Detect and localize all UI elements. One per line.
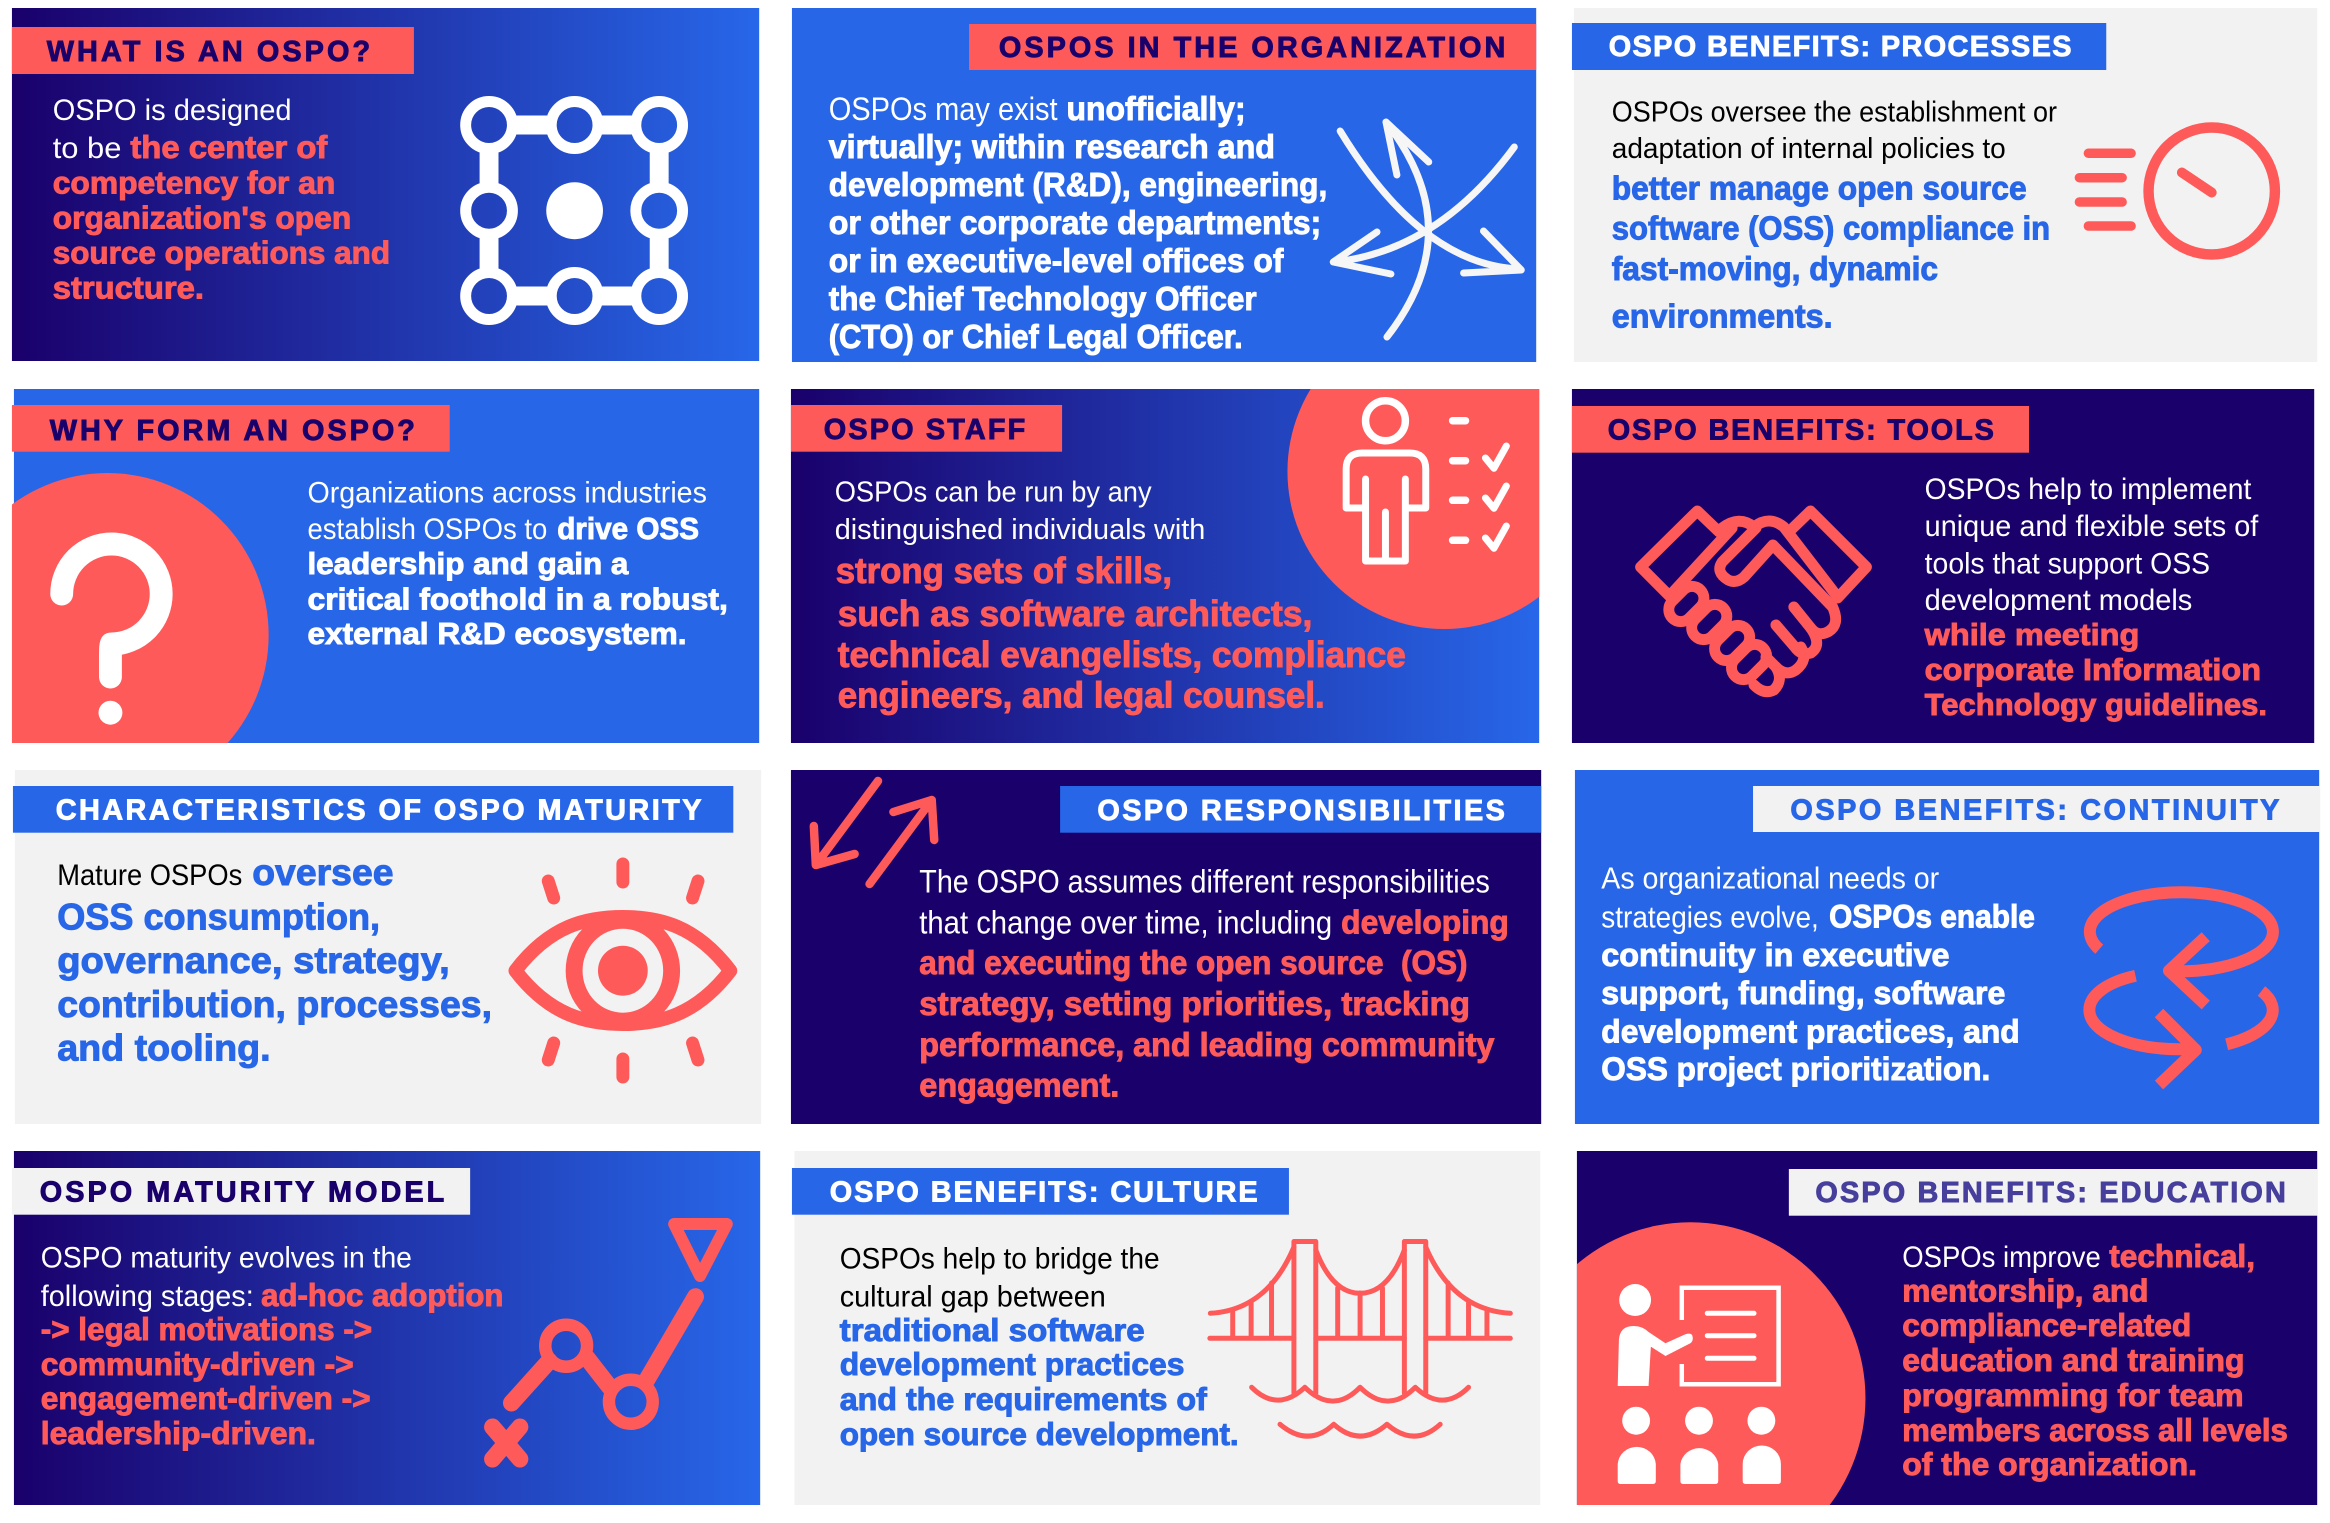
panel: OSPO benefits tools [1572, 389, 2314, 743]
text: what is an OSPO: source operations and [53, 235, 390, 271]
text: OSPOs in the organization: OSPOs may exist [829, 91, 1058, 127]
heading: OSPO benefits processes: OSPO BENEFITS: PROCESSES [1609, 31, 2071, 63]
text: OSPOs in the organization: unofficially; [1067, 91, 1246, 128]
text: OSPO benefits tools: unique and flexible sets of [1925, 510, 2259, 543]
panel: why form an OSPO [12, 389, 760, 743]
text: OSPO maturity model: ad-hoc adoption [261, 1278, 503, 1313]
heading: what is an OSPO [12, 27, 414, 74]
text: what is an OSPO: the center of [130, 130, 328, 165]
text: why form an OSPO: leadership and gain a [307, 547, 629, 581]
heading: OSPO staff [791, 405, 1062, 452]
text: OSPO maturity model [41, 1241, 503, 1451]
text: OSPO benefits education: of the organization. [1902, 1447, 2197, 1482]
text: what is an OSPO: organization's open [53, 200, 351, 236]
text: what is an OSPO: to be [53, 132, 121, 165]
text: OSPO benefits continuity: continuity in executive [1601, 937, 1950, 973]
text: OSPO benefits culture: development practices [840, 1347, 1184, 1382]
text: OSPO benefits continuity: OSS project prioritization. [1601, 1051, 1990, 1087]
panel: OSPO responsibilities [791, 770, 1541, 1124]
text: OSPO benefits continuity: support, funding, software [1601, 975, 2005, 1011]
text: why form an OSPO: critical foothold in a robust, [307, 582, 728, 617]
heading: OSPO benefits tools: OSPO BENEFITS: TOOLS [1608, 414, 1994, 446]
text: OSPO benefits tools: Technology guidelines. [1925, 688, 2267, 722]
text: why form an OSPO: external R&D ecosystem. [307, 617, 687, 651]
text: OSPO benefits continuity: As organizational needs or [1601, 860, 1939, 896]
text: OSPO benefits education: education and training [1902, 1343, 2245, 1378]
text: OSPO maturity model: following stages: [41, 1280, 254, 1313]
text: OSPO benefits education: programming for team [1902, 1378, 2244, 1413]
text: OSPO benefits continuity [1601, 860, 2035, 1087]
text: OSPO benefits tools: tools that support OSS [1925, 547, 2210, 581]
icon: two-way arrows [814, 781, 934, 884]
text: what is an OSPO: OSPO is designed [53, 94, 292, 127]
text: OSPO benefits culture: and the requirements of [840, 1382, 1208, 1417]
text: OSPO responsibilities: and executing the open source (OS) [919, 945, 1468, 982]
icon: node network [466, 102, 683, 320]
text: OSPOs in the organization [829, 91, 1327, 356]
heading: OSPO benefits tools [1572, 406, 2029, 453]
text: OSPO benefits processes: OSPOs oversee the establishment or [1612, 96, 2057, 129]
text: characteristics of OSPO maturity: and tooling. [57, 1027, 271, 1068]
text: OSPOs in the organization: development (R&D), engineering, [829, 167, 1327, 204]
heading: OSPO responsibilities [1060, 786, 1541, 833]
text: OSPO staff: technical evangelists, compliance [838, 635, 1406, 675]
text: OSPOs in the organization: the Chief Technology Officer [829, 281, 1257, 318]
text: OSPO benefits education: members across all levels [1902, 1413, 2288, 1448]
heading: OSPO benefits continuity: OSPO BENEFITS: CONTINUITY [1790, 794, 2279, 826]
text: characteristics of OSPO maturity: oversee [252, 852, 394, 893]
panel: OSPO staff [790, 389, 1540, 743]
heading: OSPO benefits continuity [1753, 786, 2320, 832]
panel: characteristics of OSPO maturity [13, 770, 761, 1124]
text: OSPO responsibilities: The OSPO assumes different responsibilities [919, 863, 1490, 900]
text: OSPO responsibilities: developing [1341, 904, 1509, 942]
text: OSPO benefits continuity: OSPOs enable [1829, 898, 2035, 935]
text: OSPO benefits education: mentorship, and [1902, 1273, 2149, 1309]
heading: characteristics of OSPO maturity: CHARACTERISTICS OF OSPO MATURITY [56, 794, 701, 826]
text: OSPO maturity model: leadership-driven. [41, 1416, 316, 1451]
text: OSPO benefits processes: fast-moving, dynamic [1612, 251, 1938, 288]
text: OSPO benefits processes: adaptation of internal policies to [1612, 133, 2006, 165]
text: OSPO benefits tools: development models [1925, 584, 2192, 617]
heading: OSPOs in the organization [969, 24, 1536, 70]
icon: cycle arrows [2089, 892, 2273, 1085]
text: characteristics of OSPO maturity: governance, strategy, [57, 940, 450, 981]
text: OSPO responsibilities [919, 863, 1509, 1105]
heading: OSPO benefits education: OSPO BENEFITS: EDUCATION [1815, 1177, 2286, 1209]
text: OSPO benefits culture: OSPOs help to bridge the [840, 1242, 1160, 1276]
text: OSPO benefits culture: cultural gap between [840, 1280, 1106, 1314]
text: OSPO benefits processes: software (OSS) compliance in [1612, 210, 2050, 248]
heading: OSPOs in the organization: OSPOS IN THE ORGANIZATION [999, 32, 1505, 64]
icon: question mark in circle [12, 473, 269, 743]
text: OSPO maturity model: community-driven -> [41, 1347, 354, 1382]
text: OSPO staff: engineers, and legal counsel. [838, 675, 1325, 716]
text: what is an OSPO: structure. [53, 270, 204, 306]
heading: OSPO benefits education [1789, 1169, 2318, 1216]
text: OSPO benefits education: compliance-related [1902, 1308, 2191, 1343]
text: OSPO benefits education: technical, [2109, 1239, 2255, 1274]
heading: OSPO maturity model [12, 1168, 470, 1215]
text: OSPO benefits culture [840, 1242, 1239, 1452]
text: OSPO benefits tools: corporate Information [1925, 653, 2261, 687]
heading: why form an OSPO: WHY FORM AN OSPO? [50, 415, 415, 447]
icon: handshake [1641, 511, 1866, 692]
text: OSPO staff: such as software architects, [838, 594, 1312, 634]
heading: OSPO responsibilities: OSPO RESPONSIBILITIES [1097, 795, 1505, 827]
icon: growth line with target [493, 1224, 727, 1459]
text: OSPO staff [835, 476, 1406, 716]
text: OSPOs in the organization: (CTO) or Chief Legal Officer. [829, 319, 1243, 356]
text: OSPO benefits culture: open source development. [840, 1417, 1239, 1452]
text: OSPOs in the organization: or in executive-level offices of [829, 243, 1284, 280]
text: OSPO benefits education [1902, 1239, 2288, 1482]
panel: OSPO benefits education [1576, 1151, 2318, 1505]
icon: person with checklist [1287, 389, 1540, 629]
text: OSPO maturity model: OSPO maturity evolves in the [41, 1241, 412, 1275]
icon: presenter with audience [1576, 1222, 1866, 1505]
heading: OSPO benefits processes [1572, 23, 2106, 70]
text: characteristics of OSPO maturity: Mature OSPOs [57, 859, 242, 892]
text: OSPOs in the organization: virtually; within research and [829, 129, 1275, 166]
heading: characteristics of OSPO maturity [13, 786, 733, 833]
text: OSPO maturity model: -> legal motivations -> [41, 1312, 372, 1347]
heading: OSPO maturity model: OSPO MATURITY MODEL [40, 1176, 444, 1208]
text: OSPOs in the organization: or other corporate departments; [829, 205, 1321, 242]
panel: OSPO benefits continuity [1575, 770, 2320, 1124]
text: OSPO benefits tools [1924, 473, 2267, 722]
text: OSPO benefits processes: environments. [1612, 298, 1833, 336]
text: OSPO benefits continuity: development practices, and [1601, 1013, 2020, 1050]
icon: stopwatch with speed lines [2079, 128, 2275, 254]
text: OSPO staff: distinguished individuals with [835, 514, 1205, 546]
text: OSPO maturity model: engagement-driven -> [41, 1381, 371, 1416]
heading: OSPO benefits culture: OSPO BENEFITS: CULTURE [830, 1176, 1258, 1208]
text: OSPO benefits continuity: strategies evolve, [1601, 899, 1819, 935]
heading: OSPO benefits culture [792, 1168, 1289, 1215]
panel: what is an OSPO [12, 8, 759, 361]
text: characteristics of OSPO maturity: OSS consumption, [57, 896, 380, 937]
text: characteristics of OSPO maturity: contribution, processes, [57, 984, 492, 1025]
heading: why form an OSPO [12, 405, 450, 452]
panel: OSPO benefits culture [792, 1151, 1540, 1505]
panel: OSPO maturity model [12, 1151, 760, 1505]
text: OSPO benefits processes [1612, 96, 2057, 336]
panel: OSPOs in the organization [792, 8, 1536, 362]
text: OSPO responsibilities: performance, and leading community [919, 1027, 1495, 1064]
text: why form an OSPO [307, 476, 728, 651]
icon: diverging arrows [1333, 122, 1521, 337]
text: why form an OSPO: drive OSS [557, 512, 699, 546]
text: characteristics of OSPO maturity [57, 852, 492, 1068]
text: OSPO benefits tools: OSPOs help to implement [1925, 473, 2251, 506]
panel: OSPO benefits processes [1572, 8, 2317, 362]
icon: suspension bridge [1210, 1242, 1510, 1436]
text: OSPO responsibilities: strategy, setting priorities, tracking [919, 986, 1470, 1023]
text: OSPO responsibilities: engagement. [919, 1067, 1119, 1105]
icon: eye with rays [515, 864, 730, 1077]
text: OSPO benefits processes: better manage open source [1612, 170, 2027, 208]
text: OSPO benefits tools: while meeting [1924, 618, 2139, 652]
heading: what is an OSPO: WHAT IS AN OSPO? [47, 36, 370, 68]
text: what is an OSPO [53, 94, 390, 306]
text: why form an OSPO: Organizations across industries [307, 476, 707, 510]
text: why form an OSPO: establish OSPOs to [307, 513, 547, 546]
text: OSPO staff: strong sets of skills, [836, 551, 1172, 591]
text: what is an OSPO: competency for an [53, 165, 335, 201]
heading: OSPO staff: OSPO STAFF [824, 414, 1025, 446]
text: OSPO staff: OSPOs can be run by any [835, 476, 1152, 509]
text: OSPO benefits education: OSPOs improve [1902, 1241, 2101, 1274]
text: OSPO responsibilities: that change over time, including [919, 904, 1332, 941]
text: OSPO benefits culture: traditional software [840, 1313, 1145, 1348]
